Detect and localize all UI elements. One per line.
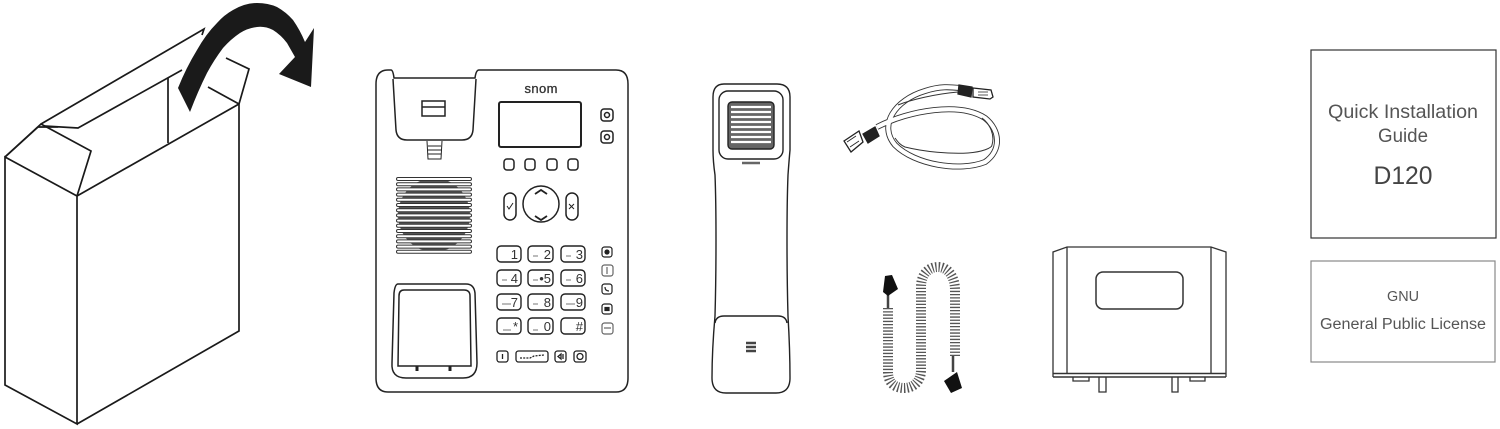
microphone holes [746, 343, 756, 351]
plug right [958, 85, 993, 99]
coil [888, 267, 955, 388]
keypad: # [576, 319, 584, 334]
handset cradle [393, 79, 476, 140]
plug left [844, 127, 879, 152]
navigation keys [504, 186, 578, 222]
inner strand [895, 92, 993, 153]
cable loops [877, 87, 997, 167]
network cable [844, 85, 997, 167]
display [499, 102, 581, 147]
cord ends [888, 295, 953, 372]
plug bottom [944, 372, 962, 393]
panel: quick installation guide [1311, 50, 1496, 238]
keypad: 0 [544, 319, 551, 334]
grille slots [731, 107, 771, 142]
side folds [1067, 247, 1211, 373]
earpiece surround [719, 91, 783, 159]
stand window [1096, 272, 1183, 309]
keypad [497, 246, 585, 334]
icon: open cardboard box [5, 29, 249, 424]
keypad: * [513, 319, 518, 334]
license heading: GNU [1387, 289, 1419, 305]
hook [427, 141, 442, 159]
license name: General Public License [1320, 316, 1486, 333]
function keys [602, 247, 613, 334]
lower handset rest [392, 284, 477, 378]
earpiece grille [728, 102, 774, 149]
cradle latch [422, 101, 445, 116]
keypad: 9 [576, 295, 583, 310]
keypad: 3 [576, 247, 583, 262]
handset [712, 84, 790, 393]
keypad: 2 [544, 247, 551, 262]
stand base line [1053, 374, 1226, 377]
mouthpiece panel [715, 316, 787, 323]
phone: desk phone body [376, 70, 628, 392]
desk stand base [1053, 247, 1226, 392]
keypad: 4 [511, 271, 518, 286]
keypad: 7 [511, 295, 518, 310]
keypad: 6 [576, 271, 583, 286]
bottom row keys [497, 351, 586, 362]
guide title: Quick Installation [1328, 101, 1478, 123]
stand body [1053, 247, 1226, 377]
brand label: snom [524, 81, 558, 96]
plug top [883, 275, 898, 296]
arrow: open the box [178, 3, 314, 112]
handset outline [712, 84, 790, 393]
coiled handset cord [883, 267, 962, 393]
speaker grille [396, 178, 472, 253]
model name: D120 [1374, 162, 1432, 190]
side buttons [601, 109, 613, 143]
keypad: 8 [544, 295, 551, 310]
guide subtitle: Guide [1378, 125, 1428, 147]
keypad: 1 [511, 247, 518, 262]
keypad: •5 [539, 271, 551, 286]
panel: GNU license [1311, 261, 1495, 362]
stand feet [1073, 377, 1205, 392]
hook tab [742, 162, 760, 164]
soft keys [504, 159, 578, 170]
phone outline [376, 70, 628, 392]
